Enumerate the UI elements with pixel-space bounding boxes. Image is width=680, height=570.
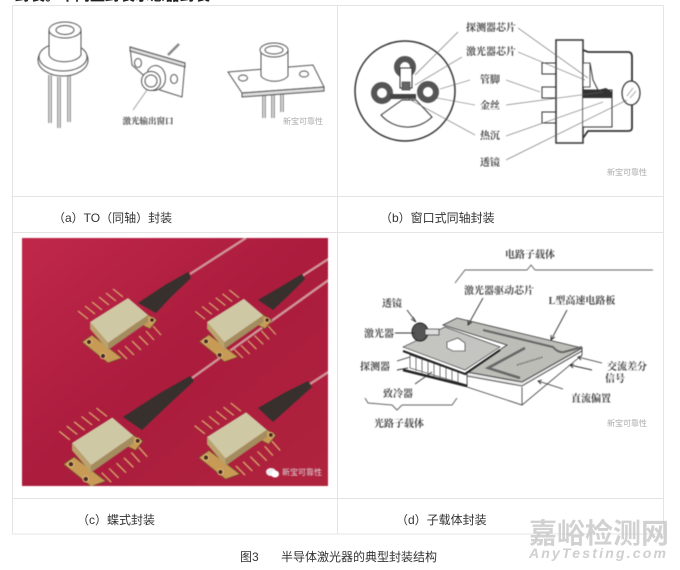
labels d xyxy=(360,248,647,430)
labels b: 管脚 xyxy=(480,73,500,86)
brackets xyxy=(365,265,653,410)
labels d: 探测器 xyxy=(360,360,390,373)
labels d: 信号 xyxy=(605,372,625,385)
caption b: （b）窗口式同轴封装 xyxy=(380,210,495,225)
labels b: 探测器芯片 xyxy=(466,21,516,34)
fibers xyxy=(190,238,330,384)
labels d: 激光器驱动芯片 xyxy=(464,284,534,297)
labels b: 金丝 xyxy=(480,99,500,112)
labels d: 直流偏置 xyxy=(571,392,611,405)
labels d: 光路子载体 xyxy=(374,417,424,430)
labels b xyxy=(466,21,516,169)
traces xyxy=(483,330,582,378)
panel b: window coaxial diagram xyxy=(355,21,640,169)
panel c: butterfly package photo xyxy=(22,238,330,486)
icon: window flange package xyxy=(130,44,185,110)
panel a: TO coaxial packages xyxy=(38,22,324,128)
block and board xyxy=(443,318,582,405)
optical submount xyxy=(403,323,500,386)
labels d: L型高速电路板 xyxy=(549,294,615,307)
labels d: 致冷器 xyxy=(383,387,413,400)
boots xyxy=(123,272,312,430)
label: laser output window: 激光输出窗口 xyxy=(122,116,174,126)
labels d: 透镜 xyxy=(382,297,402,310)
watermark b: 新宝可靠性 xyxy=(607,167,647,177)
labels d: 交流差分 xyxy=(607,360,647,373)
labels b: 激光器芯片 xyxy=(466,45,516,58)
caption d: （d）子载体封装 xyxy=(396,513,487,527)
arrows xyxy=(395,298,602,389)
icon: TO can package xyxy=(38,22,88,128)
watermark d: 新宝可靠性 xyxy=(607,418,647,428)
leader lines xyxy=(407,28,627,160)
watermark a: 新宝可靠性 xyxy=(283,116,323,126)
figure caption: 图3 xyxy=(240,550,259,564)
labels b: 透镜 xyxy=(480,156,500,169)
labels d: 激光器 xyxy=(364,327,394,340)
wechat watermark c: 新宝可靠性 xyxy=(282,467,322,477)
site watermark: AnyTesting.com xyxy=(528,545,668,561)
panel d: submount package diagram xyxy=(360,248,653,430)
caption c: （c）蝶式封装 xyxy=(77,512,155,527)
side view xyxy=(542,40,640,143)
butterfly modules xyxy=(59,289,280,486)
photo background xyxy=(22,238,328,486)
labels b: 热沉 xyxy=(480,129,500,142)
figure title: 半导体激光器的典型封装结构 xyxy=(281,549,437,564)
front view xyxy=(355,41,455,141)
labels d: 电路子载体 xyxy=(505,248,555,261)
wechat watermark c xyxy=(266,467,322,478)
caption a: （a）TO（同轴）封装 xyxy=(53,210,172,225)
site watermark: 嘉峪检测网 xyxy=(529,518,669,549)
icon: flat-mount package xyxy=(228,43,324,118)
